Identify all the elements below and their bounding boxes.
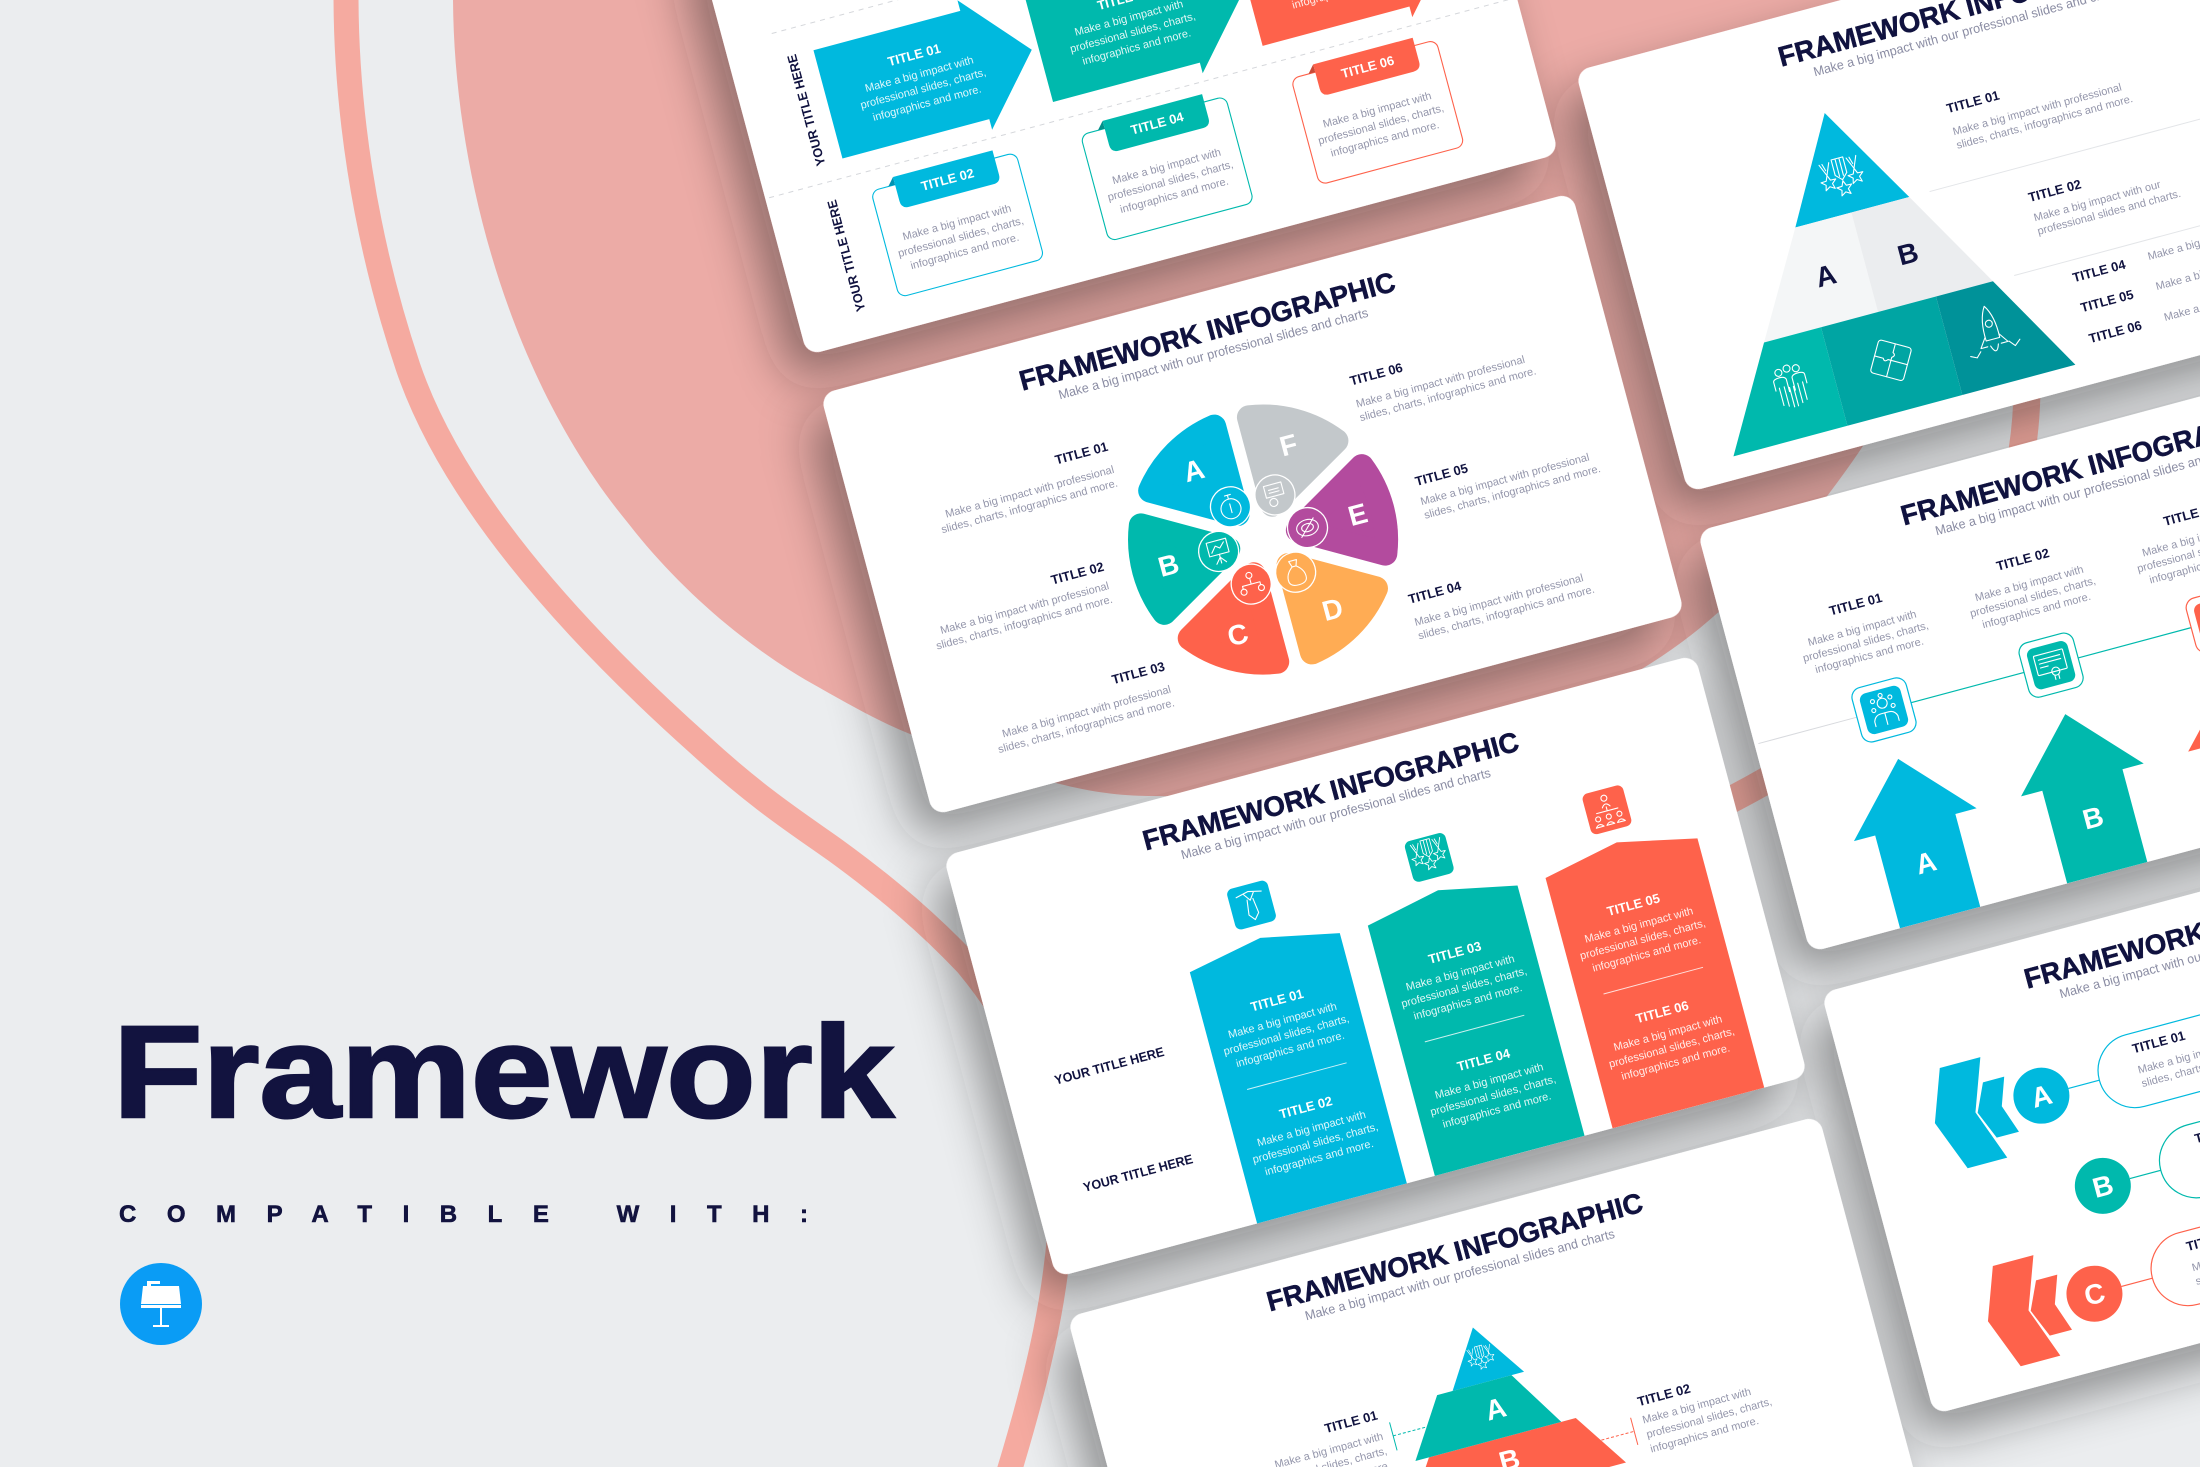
panel: arrows table slide top — [694, 0, 1559, 355]
panel: arrows slide right — [1697, 330, 2200, 952]
letters: F — [1276, 428, 1301, 462]
column 2: Make a big impact with — [1405, 953, 1516, 994]
icon: puzzle — [1870, 339, 1912, 381]
arrow: title 01: Make a big impact with — [864, 54, 975, 95]
text block: title 03 — [2185, 1192, 2200, 1288]
letters: C — [1224, 617, 1252, 652]
text block: title 01: TITLE 01 — [1945, 88, 2001, 116]
text block: title 03: slides, charts, infographics and more. — [997, 697, 1176, 756]
heading: FRAMEWORK INFOGRAPHIC — [1139, 726, 1522, 856]
node C: C — [2081, 1277, 2108, 1312]
box: title 06: Make a big impact with — [1322, 90, 1433, 131]
icon: medals — [1816, 153, 1867, 200]
salmon curve left — [346, 0, 1062, 1467]
node A: A — [2028, 1079, 2055, 1114]
arrow: title 03 — [1021, 0, 1260, 113]
heading: FRAMEWORK INFOGRAPHIC — [1263, 1187, 1646, 1317]
text block: title 06: Make a big impact with professional — [1355, 354, 1526, 411]
arrow: title 03: infographics and more. — [1081, 27, 1192, 68]
column 3: infographics and more. — [1620, 1042, 1731, 1083]
text block: title 02: infographics and more. — [1649, 1415, 1760, 1456]
column 2: TITLE 03 — [1427, 938, 1483, 967]
column 3: Make a big impact with — [1583, 905, 1695, 946]
text block: title 01 — [2130, 995, 2200, 1090]
column 1: TITLE 01 — [1249, 986, 1305, 1014]
divider 1 — [1930, 73, 2200, 192]
arrow: title 03: professional slides, charts, — [1069, 10, 1197, 56]
segment D — [1256, 533, 1382, 659]
text block: title 01 — [930, 439, 1119, 536]
column 1: Make a big impact with — [1227, 1001, 1338, 1041]
text block: title 04: TITLE 04 — [1407, 578, 1464, 607]
icon: team tree — [1227, 560, 1276, 609]
dashed dividers — [728, 0, 1513, 198]
column 2: TITLE 04 — [1455, 1045, 1512, 1074]
text block: title 02: Make a big impact with professional — [939, 580, 1110, 637]
stacked pyramid: A — [1482, 1391, 1509, 1426]
text block: title 01: TITLE 01 — [1053, 439, 1110, 467]
subheading: Make a big impact with our professional slides and charts — [1179, 765, 1493, 862]
letters — [1133, 415, 1393, 665]
icon: target — [1283, 503, 1332, 552]
pyramid chart: B — [1894, 236, 1922, 271]
pie chart — [1111, 383, 1415, 696]
text block: title 01 — [1250, 1408, 1392, 1467]
column 3: professional slides, charts, — [1579, 917, 1707, 963]
pink blob — [453, 0, 2000, 796]
text block: title 02: TITLE 02 — [1995, 545, 2051, 574]
panel: stacked pyramid slide bottom — [1067, 1116, 1932, 1467]
column 1: professional slides, charts, — [1251, 1121, 1380, 1166]
text block: title 01: slides, charts, infographics and more. — [940, 477, 1119, 536]
segment B — [1132, 505, 1240, 615]
box: title 06: professional slides, charts, — [1317, 102, 1445, 147]
text block: title 03: Make a big impact with professional — [1001, 684, 1172, 740]
icon box: third — [2184, 586, 2200, 655]
node B: B — [2089, 1169, 2117, 1204]
icon box: certificate — [2017, 631, 2085, 699]
box: title 04: TITLE 04 — [1129, 109, 1186, 138]
connector right — [1593, 1418, 1638, 1455]
arrow A — [1836, 743, 2001, 934]
column 1: Make a big impact with — [1256, 1109, 1367, 1149]
divider 2 — [2014, 173, 2200, 276]
icon: medals — [1465, 1343, 1497, 1372]
text block: title 01: Make a big impact with — [1807, 609, 1918, 649]
node B — [2066, 1005, 2200, 1229]
icon: team — [1770, 361, 1812, 410]
box: title 06: infographics and more. — [1329, 119, 1441, 160]
column 2 — [1364, 870, 1585, 1176]
heading: Framework: Framework — [113, 998, 894, 1145]
column 2: professional slides, charts, — [1400, 965, 1528, 1010]
letters: E — [1345, 497, 1371, 532]
letters: A — [1180, 453, 1208, 488]
arrow: title 01: TITLE 01 — [886, 41, 942, 69]
text block: title 02 — [1958, 535, 2101, 634]
text block: title 05: TITLE 05 — [1413, 460, 1470, 489]
text block: title 01: TITLE 01 — [1323, 1408, 1379, 1436]
column 2: infographics and more. — [1412, 982, 1524, 1023]
connector left — [1390, 1409, 1448, 1450]
box: title 04: Make a big impact with — [1111, 147, 1222, 187]
row label 2: YOUR TITLE HERE — [1082, 1151, 1195, 1195]
text block: title 04: Make a big impact with professional — [1413, 572, 1585, 629]
box: title 02: infographics and more. — [909, 232, 1020, 272]
text block: title 02: Make a big impact with — [1974, 564, 2085, 604]
panel: pyramid slide top right — [1575, 0, 2200, 492]
column 1: TITLE 02 — [1278, 1093, 1334, 1122]
text block: title 01: TITLE 01 — [2130, 1028, 2187, 1056]
segment A — [1144, 420, 1270, 546]
node A — [2005, 915, 2200, 1139]
arrow B: B — [2079, 800, 2107, 836]
icon: medals — [1404, 832, 1455, 883]
node C — [2058, 1113, 2200, 1337]
text block: title 03 — [2125, 491, 2200, 589]
column 3 — [1541, 822, 1764, 1128]
panel: chevrons slide bottom right — [1821, 791, 2200, 1414]
text block: title 02 — [1636, 1361, 1777, 1456]
text block: title 01: infographics and more. — [1814, 636, 1925, 676]
column 3: TITLE 05 — [1605, 890, 1662, 919]
text block: title 05: TITLE 05 — [2079, 287, 2135, 315]
row label 1: YOUR TITLE HERE — [784, 52, 828, 168]
text block: title 05: Make a big impact with professional — [1419, 452, 1591, 508]
column 3: infographics and more. — [1591, 934, 1702, 975]
text block: title 06: TITLE 06 — [2087, 318, 2143, 346]
timeline line — [1758, 628, 2191, 744]
arrow B — [2003, 698, 2169, 889]
segment E — [1286, 464, 1394, 574]
icon: tie — [1226, 879, 1277, 931]
text block: title 01: professional slides, charts, — [1802, 620, 1930, 665]
subheading: Make a big impact with our professional slides and charts — [1303, 1226, 1617, 1323]
icon: money bag — [1271, 548, 1320, 597]
text block: title 01 — [1945, 54, 2134, 152]
column 2: infographics and more. — [1441, 1090, 1553, 1131]
arrow: title 01: infographics and more. — [872, 83, 983, 124]
text block: title 06 — [2087, 261, 2200, 346]
arrow A: A — [1912, 845, 1940, 880]
column 2: professional slides, charts, — [1429, 1073, 1557, 1119]
segment F — [1229, 409, 1339, 516]
column 1: professional slides, charts, — [1222, 1013, 1351, 1058]
text block: title 04: TITLE 04 — [2071, 256, 2128, 285]
box: title 02: Make a big impact with — [901, 203, 1013, 243]
text block: title 02 — [2193, 1085, 2200, 1180]
box: title 06: TITLE 06 — [1340, 53, 1396, 81]
text block: title 02 — [2027, 152, 2182, 238]
column 3: professional slides, charts, — [1608, 1026, 1736, 1071]
text block: title 04 — [2071, 200, 2200, 285]
text block: title 04 — [1407, 545, 1596, 642]
box: title 04: infographics and more. — [1119, 176, 1230, 216]
heading: FRAMEWORK INFOGRAPHIC — [1016, 266, 1399, 397]
column 3: TITLE 06 — [1634, 998, 1690, 1026]
stacked pyramid — [1364, 1298, 1626, 1467]
box: title 02: TITLE 02 — [919, 165, 976, 194]
column 1 — [1186, 918, 1407, 1223]
pyramid chart — [1654, 67, 2075, 456]
text block: title 03 — [986, 659, 1176, 756]
arrow: title 01 — [811, 0, 1049, 169]
letters: B — [1155, 548, 1182, 583]
text block: title 02: slides, charts, infographics and more. — [935, 594, 1114, 652]
box: title 04: professional slides, charts, — [1106, 159, 1235, 204]
column 3: Make a big impact with — [1612, 1013, 1724, 1054]
text block: title 02 — [926, 559, 1114, 652]
text block: title 04: slides, charts, infographics and more. — [1417, 584, 1596, 642]
arrow C — [2171, 653, 2200, 844]
subheading: compatible with: COMPATIBLE WITH: — [119, 1201, 808, 1228]
text block: title 01: slides, charts, infographics and more. — [1955, 93, 2134, 152]
icon: board — [1250, 470, 1299, 519]
row label 2: YOUR TITLE HERE — [824, 198, 868, 313]
text block: title 02: professional slides, charts, — [1645, 1396, 1773, 1441]
text block: title 06 — [1348, 327, 1538, 424]
icon: chart board — [1194, 527, 1243, 576]
column 1: infographics and more. — [1235, 1030, 1346, 1070]
subheading: Make a big impact with our professional slides and charts — [1057, 305, 1370, 402]
text block: title 05: slides, charts, infographics and more. — [1423, 463, 1602, 522]
segment C — [1187, 563, 1298, 670]
icon: org chart — [1581, 784, 1633, 836]
column 2: Make a big impact with — [1434, 1061, 1545, 1102]
icon: keynote — [120, 1263, 202, 1345]
salmon curve right — [1500, 380, 2027, 890]
text block: title 02: TITLE 02 — [1636, 1381, 1692, 1409]
chevrons blue — [1921, 1053, 2025, 1173]
icon box: network — [1850, 676, 1918, 744]
text block: title 01: Make a big impact with professional — [944, 464, 1115, 521]
letters: D — [1319, 592, 1346, 627]
column 1: infographics and more. — [1264, 1138, 1375, 1178]
text block: title 05 — [1413, 427, 1602, 522]
panel: pie slide — [820, 193, 1685, 815]
box: title 02 — [869, 145, 1044, 297]
text block: title 06: slides, charts, infographics and more. — [1358, 365, 1538, 424]
text block: title 01: TITLE 01 — [1828, 590, 1884, 618]
text block: title 06: TITLE 06 — [1348, 360, 1404, 388]
text block: title 01 — [1791, 580, 1934, 678]
arrow: title 01: professional slides, charts, — [859, 67, 987, 112]
text block: title 02: Make a big impact with our — [2033, 179, 2162, 224]
text block: title 02: infographics and more. — [1981, 591, 2092, 631]
panel: columns slide — [943, 655, 1808, 1277]
chevrons coral — [1974, 1251, 2078, 1371]
text block: title 03: TITLE 03 — [1110, 659, 1166, 687]
icon: rocket — [1959, 300, 2022, 359]
row label 1: YOUR TITLE HERE — [1053, 1044, 1166, 1088]
text block: title 02: professional slides and charts. — [2036, 188, 2182, 238]
box: title 02: professional slides, charts, — [897, 215, 1025, 260]
text block: title 05 — [2079, 230, 2200, 315]
pyramid chart: A — [1812, 258, 1840, 293]
icon: stopwatch — [1206, 482, 1255, 531]
text block: title 02: TITLE 02 — [1049, 559, 1105, 587]
text block: title 01: Make a big impact with professional — [1952, 82, 2123, 138]
box: title 06 — [1289, 32, 1464, 185]
box: title 04 — [1078, 88, 1254, 241]
text block: title 02: Make a big impact with — [1641, 1386, 1752, 1427]
text block: title 02: TITLE 02 — [2027, 176, 2083, 205]
arrow: title 05 — [1231, 0, 1469, 56]
text block: title 02: professional slides, charts, — [1969, 575, 2097, 620]
